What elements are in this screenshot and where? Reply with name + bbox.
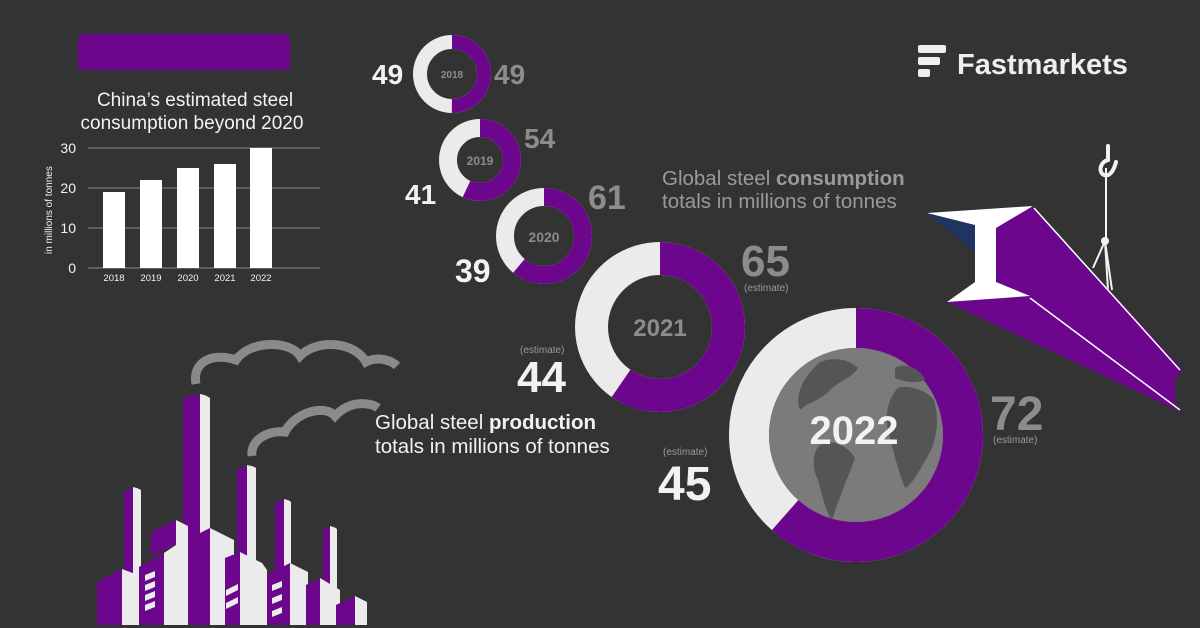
bar chart: China steel consumption: 2022 — [250, 273, 272, 284]
donut 2020 — [455, 179, 626, 289]
donut 2018: 49 — [494, 59, 525, 90]
donut 2021: (estimate) — [744, 283, 788, 294]
bar chart: China steel consumption: 2019 — [140, 273, 162, 284]
donut 2022 with globe: 72 — [990, 388, 1043, 441]
donut 2019 — [405, 123, 556, 210]
logo: Fastmarkets: Fastmarkets — [957, 49, 1128, 81]
donut 2018: 49 — [372, 59, 403, 90]
donut 2019: 54 — [524, 123, 556, 154]
donut 2022 with globe: 2022 — [810, 409, 898, 453]
donut 2019: 41 — [405, 179, 436, 210]
purple header bar — [78, 34, 290, 70]
icon: factory — [97, 394, 367, 625]
icon: steel beam on hook — [927, 146, 1183, 413]
bar chart: China steel consumption: in millions of tonnes — [44, 166, 55, 254]
bar chart: China steel consumption: 2020 — [177, 273, 199, 284]
icon: smoke clouds — [195, 344, 397, 456]
donut 2020: 2020 — [528, 229, 560, 245]
donut 2021: (estimate) — [520, 345, 564, 356]
production caption: totals in millions of tonnes — [375, 435, 610, 458]
bar chart: China steel consumption: consumption beyond 2020 — [81, 113, 303, 134]
chart title: China’s estimated steel — [97, 90, 293, 111]
donut 2018: 2018 — [441, 70, 464, 81]
donut 2021: 65 — [741, 237, 790, 286]
bar chart: China steel consumption: 2018 — [103, 273, 125, 284]
donut 2021: 2021 — [633, 315, 687, 342]
donut 2021: 44 — [517, 353, 566, 402]
donut 2022 with globe: (estimate) — [993, 435, 1037, 446]
donut 2022 with globe — [658, 328, 1043, 542]
donut 2020: 61 — [588, 179, 626, 217]
consumption caption — [662, 167, 905, 213]
consumption caption: totals in millions of tonnes — [662, 190, 897, 213]
bar chart: China steel consumption: 20 — [60, 180, 76, 196]
donut 2020: 39 — [455, 253, 491, 289]
production caption: Global steel production — [375, 411, 596, 434]
bar chart: China steel consumption: 10 — [60, 220, 76, 236]
bar chart: China steel consumption — [44, 90, 320, 284]
bar chart: China steel consumption: 0 — [68, 260, 76, 276]
donut 2018 — [372, 42, 525, 106]
bar chart: China steel consumption: 2021 — [214, 273, 236, 284]
donut 2022 with globe: 45 — [658, 458, 711, 511]
donut 2021 — [517, 237, 790, 402]
bar chart: China steel consumption: 30 — [60, 140, 76, 156]
donut 2022 with globe: (estimate) — [663, 447, 707, 458]
consumption caption: Global steel consumption — [662, 167, 905, 190]
donut 2019: 2019 — [467, 154, 494, 168]
production caption — [375, 411, 610, 458]
buildings — [97, 569, 122, 625]
icon: globe — [769, 348, 943, 522]
